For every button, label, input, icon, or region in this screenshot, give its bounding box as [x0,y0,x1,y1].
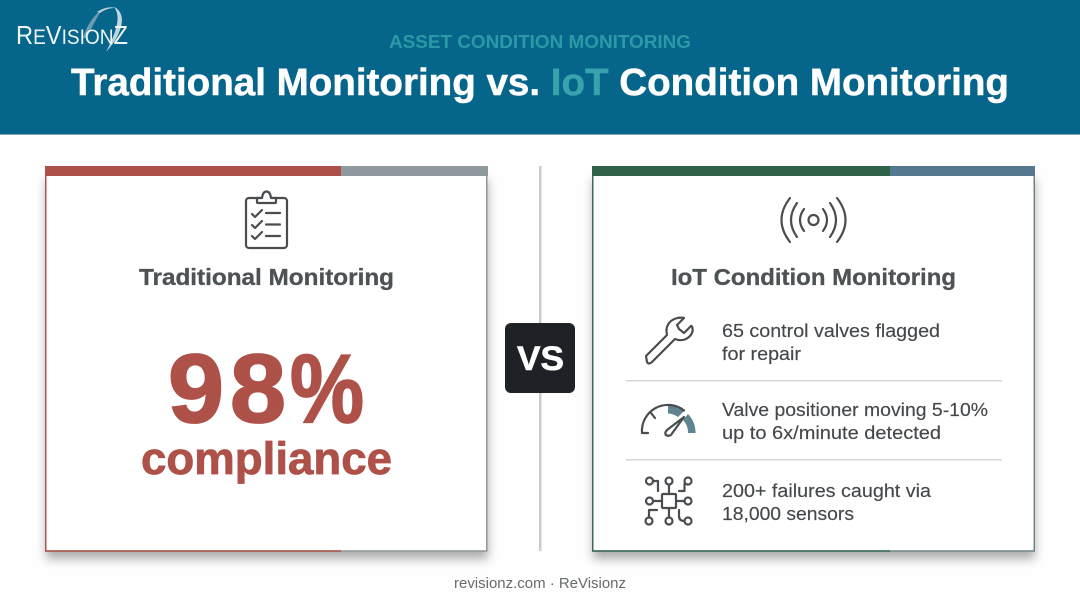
vs badge: VS [517,340,564,378]
icon: gauge [642,405,696,436]
big stat: 98%: 9 [168,334,224,443]
title: Traditional Monitoring vs. IoT Condition Monitoring [71,62,1009,104]
divider line [539,166,542,551]
panel: iot condition monitoring [592,166,1035,559]
big stat: 98%: 8 [230,334,286,443]
item: valve positioner [642,399,988,443]
footer: revisionz.com · ReVisionz [454,576,626,592]
eyebrow label: ASSET CONDITION MONITORING [389,32,691,52]
vs badge [505,323,575,393]
item: control valves [646,318,940,364]
panel: traditional monitoring [45,166,488,559]
divider [626,380,1002,382]
item: failures caught [646,478,932,524]
item: control valves: for repair [722,343,801,364]
divider [626,459,1002,460]
logo: ReVisionz: REVISIONZ [16,20,128,50]
panel top bar [592,166,1035,176]
big stat: 98%: % [290,334,364,443]
icon: clipboard checklist [246,192,287,248]
item: valve positioner: up to 6x/minute detected [722,422,941,443]
panel top bar [45,166,488,176]
panel heading: Traditional Monitoring [139,264,394,290]
icon: radio signal [782,198,846,242]
item text: 65 control valves flagged [722,320,940,341]
icon: circuit network [646,478,692,524]
icon: wrench [646,318,693,364]
panel heading: IoT Condition Monitoring [671,264,956,290]
item text: Valve positioner moving 5-10% [722,399,988,420]
header band [0,0,1080,135]
logo: ReVisionz [16,7,128,52]
stat label: compliance: compliance [141,433,392,484]
item: failures caught: 18,000 sensors [722,503,854,524]
item text: 200+ failures caught via [722,480,932,501]
